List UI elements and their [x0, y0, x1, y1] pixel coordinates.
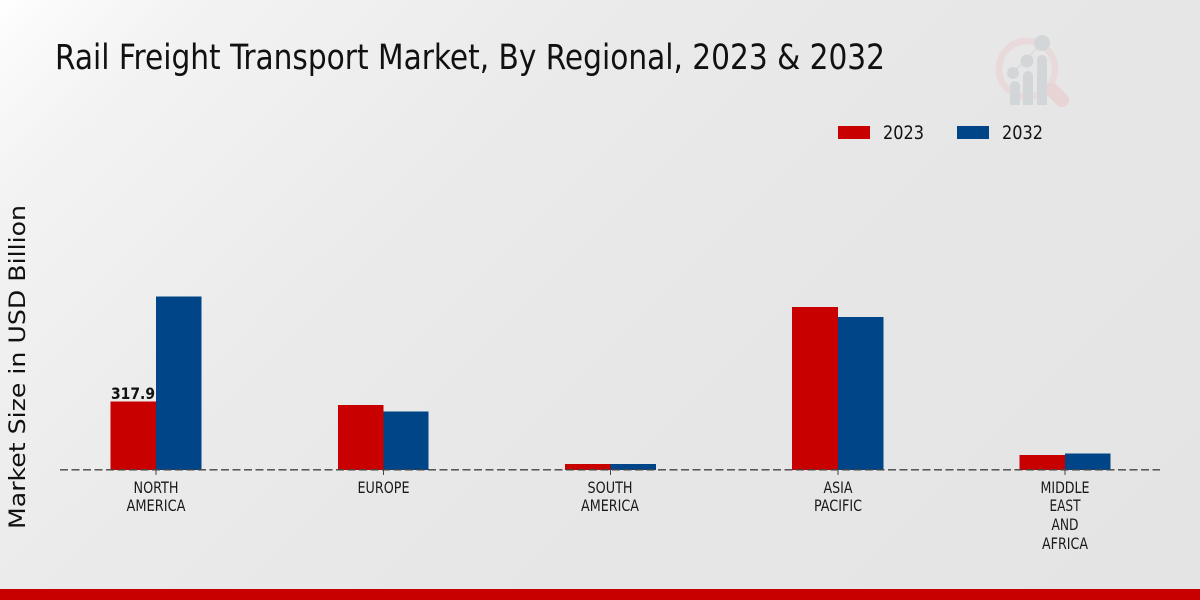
x axis labels: NORTH	[134, 478, 178, 497]
icon: watermark logo	[999, 35, 1062, 105]
bars: South America	[565, 464, 656, 470]
legend	[838, 123, 1043, 144]
x axis labels: SOUTH	[588, 478, 632, 497]
bars: Europe	[338, 405, 428, 470]
x axis labels: ASIA	[824, 478, 853, 497]
legend item: 2032	[957, 123, 1043, 144]
legend item: 2023: 2023	[883, 123, 924, 144]
bottom red band	[0, 589, 1200, 600]
x axis labels: AFRICA	[1042, 534, 1088, 553]
x axis labels	[126, 478, 1090, 553]
bars: Middle East and Africa	[1020, 454, 1110, 470]
title: Rail Freight Transport Market, By Regional, 2023 & 2032	[55, 38, 885, 78]
x axis baseline	[60, 469, 1160, 471]
x axis labels: EUROPE	[358, 478, 410, 497]
x axis labels: AND	[1052, 515, 1078, 534]
x axis labels: MIDDLE	[1040, 478, 1090, 497]
bars: Asia Pacific	[792, 307, 884, 470]
x axis labels: AMERICA	[126, 496, 186, 515]
legend item: 2032: 2032	[1002, 123, 1043, 144]
x axis labels: EAST	[1050, 496, 1081, 515]
value label: 317.9	[111, 384, 155, 403]
bars: North America	[110, 296, 202, 470]
bar chart	[60, 296, 1160, 553]
x axis labels: AMERICA	[581, 496, 639, 515]
y axis title: Market Size in USD Billion	[5, 205, 31, 529]
legend item: 2023	[838, 123, 924, 144]
x axis labels: PACIFIC	[814, 496, 862, 515]
